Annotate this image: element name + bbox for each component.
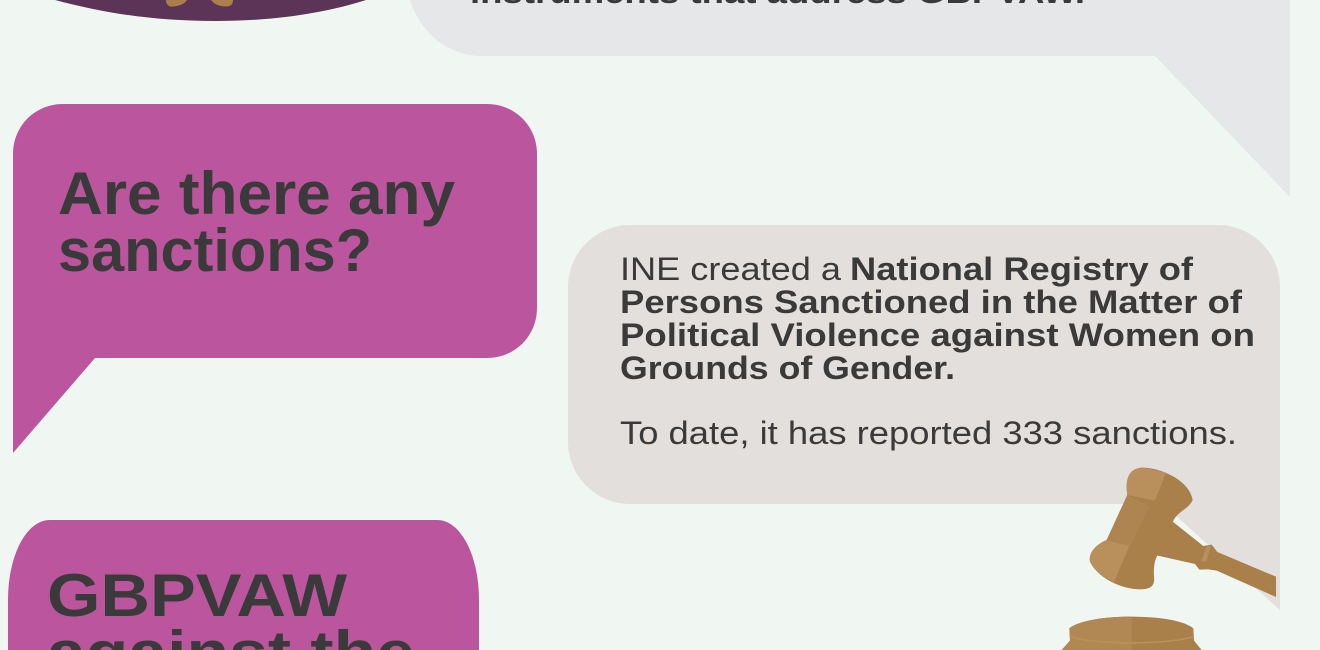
- text: registry description: National Registry of: [850, 251, 1193, 287]
- text: registry description: Persons Sanctioned in the Matter of: [620, 284, 1242, 320]
- panel: question bubble on sanctions: [13, 104, 537, 453]
- panel: top grey speech bubble: [410, 0, 1290, 197]
- icon: wooden gavel and sound block: [1062, 468, 1276, 650]
- text: registry description: Grounds of Gender.: [620, 350, 955, 386]
- panel: GBPVAW question bubble: [8, 520, 479, 650]
- text: registry description: Political Violence against Women on: [620, 317, 1255, 353]
- heading: GBPVAW against the: [47, 562, 415, 650]
- heading: are there any sanctions: sanctions?: [58, 217, 372, 284]
- heading: are there any sanctions: [58, 160, 456, 284]
- sound block: [1062, 617, 1202, 650]
- gavel handle: [1157, 522, 1276, 597]
- text: registry description: To date, it has reported 333 sanctions.: [620, 415, 1237, 451]
- panel: answer bubble on the national registry: [568, 225, 1280, 610]
- text: registry description: [620, 251, 1255, 451]
- heading: are there any sanctions: Are there any: [58, 160, 456, 227]
- gavel head: [1090, 468, 1193, 589]
- icon: dark purple figure base cropped at top: [55, 0, 366, 21]
- heading: GBPVAW against the: GBPVAW: [47, 562, 347, 629]
- text: registry description: INE created a: [620, 251, 841, 287]
